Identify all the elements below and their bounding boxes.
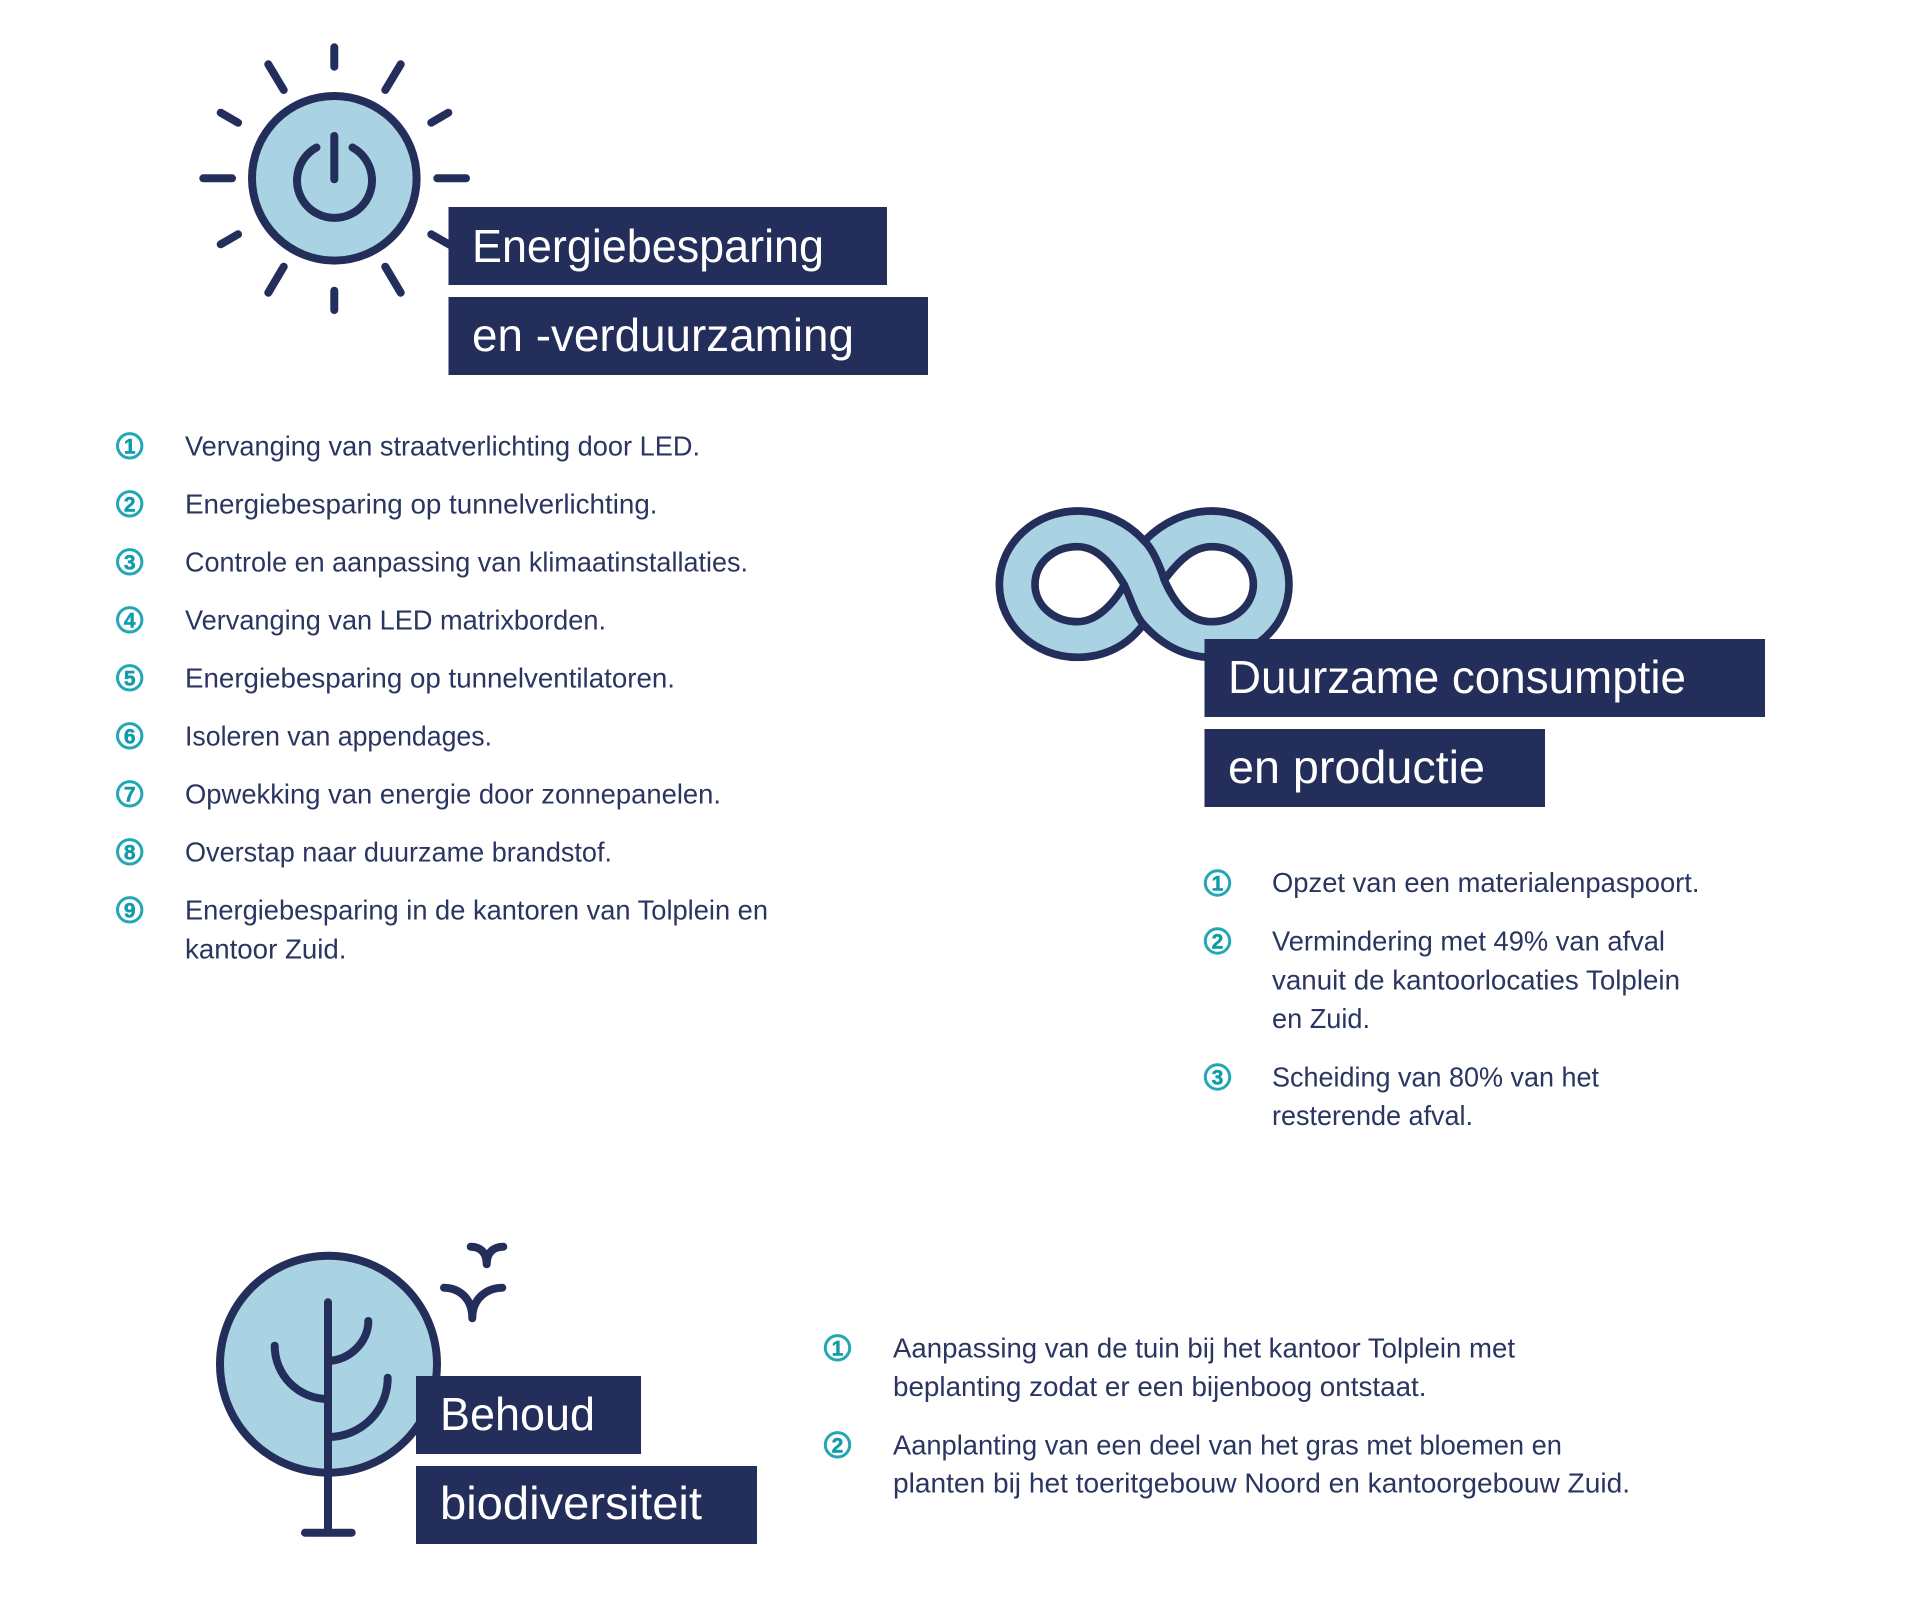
- item 9: [118, 894, 768, 964]
- item 1: beplanting zodat er een bijenboog ontstaat.: [893, 1371, 1426, 1402]
- item 2: 2: [1212, 930, 1223, 954]
- item 2: [1205, 926, 1680, 1034]
- heading: duurzame consumptie en productie: [1204, 639, 1765, 807]
- item 9: kantoor Zuid.: [185, 933, 346, 964]
- item 2: Aanplanting van een deel van het gras met bloemen en: [893, 1429, 1562, 1460]
- item 7: 7: [124, 783, 136, 806]
- item 1: Opzet van een materialenpaspoort.: [1272, 867, 1700, 898]
- panel: behoud biodiversiteit: [220, 1247, 1630, 1544]
- item 2: 2: [124, 493, 136, 516]
- item 8: Overstap naar duurzame brandstof.: [185, 836, 612, 867]
- panel: energiebesparing: [118, 47, 928, 964]
- heading: behoud biodiversiteit: Behoud: [440, 1388, 595, 1440]
- item 3: Controle en aanpassing van klimaatinstallaties.: [185, 546, 748, 577]
- item 9: 9: [124, 899, 136, 922]
- heading: energiebesparing en -verduurzaming: Energiebesparing: [472, 220, 824, 272]
- icon: sun with power symbol: [203, 47, 466, 310]
- item 2: Vermindering met 49% van afval: [1272, 926, 1665, 956]
- item 1: Aanpassing van de tuin bij het kantoor Tolplein met: [893, 1332, 1515, 1363]
- item 6: Isoleren van appendages.: [185, 720, 492, 751]
- item 9: Energiebesparing in de kantoren van Tolplein en: [185, 894, 768, 925]
- item 3: Scheiding van 80% van het: [1272, 1062, 1599, 1092]
- item 6: 6: [124, 725, 136, 748]
- icon: infinity loop: [999, 511, 1289, 657]
- item 7: Opwekking van energie door zonnepanelen.: [185, 778, 721, 809]
- icon: birds: [444, 1247, 503, 1318]
- item 2: en Zuid.: [1272, 1003, 1370, 1034]
- item 3: [1205, 1062, 1599, 1131]
- item 1: Vervanging van straatverlichting door LED.: [185, 430, 700, 461]
- item 3: 3: [1212, 1066, 1223, 1090]
- item 5: 5: [124, 667, 136, 690]
- heading: duurzame consumptie en productie: en productie: [1228, 741, 1485, 793]
- list: energie maatregelen: [118, 430, 768, 964]
- item 3: resterende afval.: [1272, 1100, 1473, 1131]
- item 4: Vervanging van LED matrixborden.: [185, 604, 606, 635]
- heading: energiebesparing en -verduurzaming: en -verduurzaming: [472, 309, 854, 361]
- item 2: planten bij het toeritgebouw Noord en kantoorgebouw Zuid.: [893, 1467, 1630, 1498]
- item 3: 3: [124, 551, 136, 574]
- list: consumptie maatregelen: [1205, 867, 1700, 1131]
- item 2: [825, 1429, 1630, 1498]
- item 8: 8: [124, 841, 136, 864]
- item 4: 4: [124, 609, 136, 632]
- heading: behoud biodiversiteit: biodiversiteit: [440, 1477, 702, 1529]
- icon: tree: [220, 1256, 437, 1533]
- heading: energiebesparing en -verduurzaming: [448, 207, 928, 375]
- item 1: 1: [832, 1337, 844, 1360]
- item 2: Energiebesparing op tunnelverlichting.: [185, 488, 658, 519]
- item 5: Energiebesparing op tunnelventilatoren.: [185, 662, 675, 693]
- item 1: 1: [124, 435, 136, 458]
- panel: duurzame consumptie: [999, 511, 1765, 1131]
- heading: behoud biodiversiteit: [416, 1376, 757, 1544]
- item 2: vanuit de kantoorlocaties Tolplein: [1272, 964, 1680, 996]
- item 1: [825, 1332, 1515, 1402]
- item 1: 1: [1212, 872, 1224, 896]
- item 2: 2: [832, 1434, 843, 1457]
- list: biodiversiteit maatregelen: [825, 1332, 1630, 1498]
- heading: duurzame consumptie en productie: Duurzame consumptie: [1228, 651, 1686, 703]
